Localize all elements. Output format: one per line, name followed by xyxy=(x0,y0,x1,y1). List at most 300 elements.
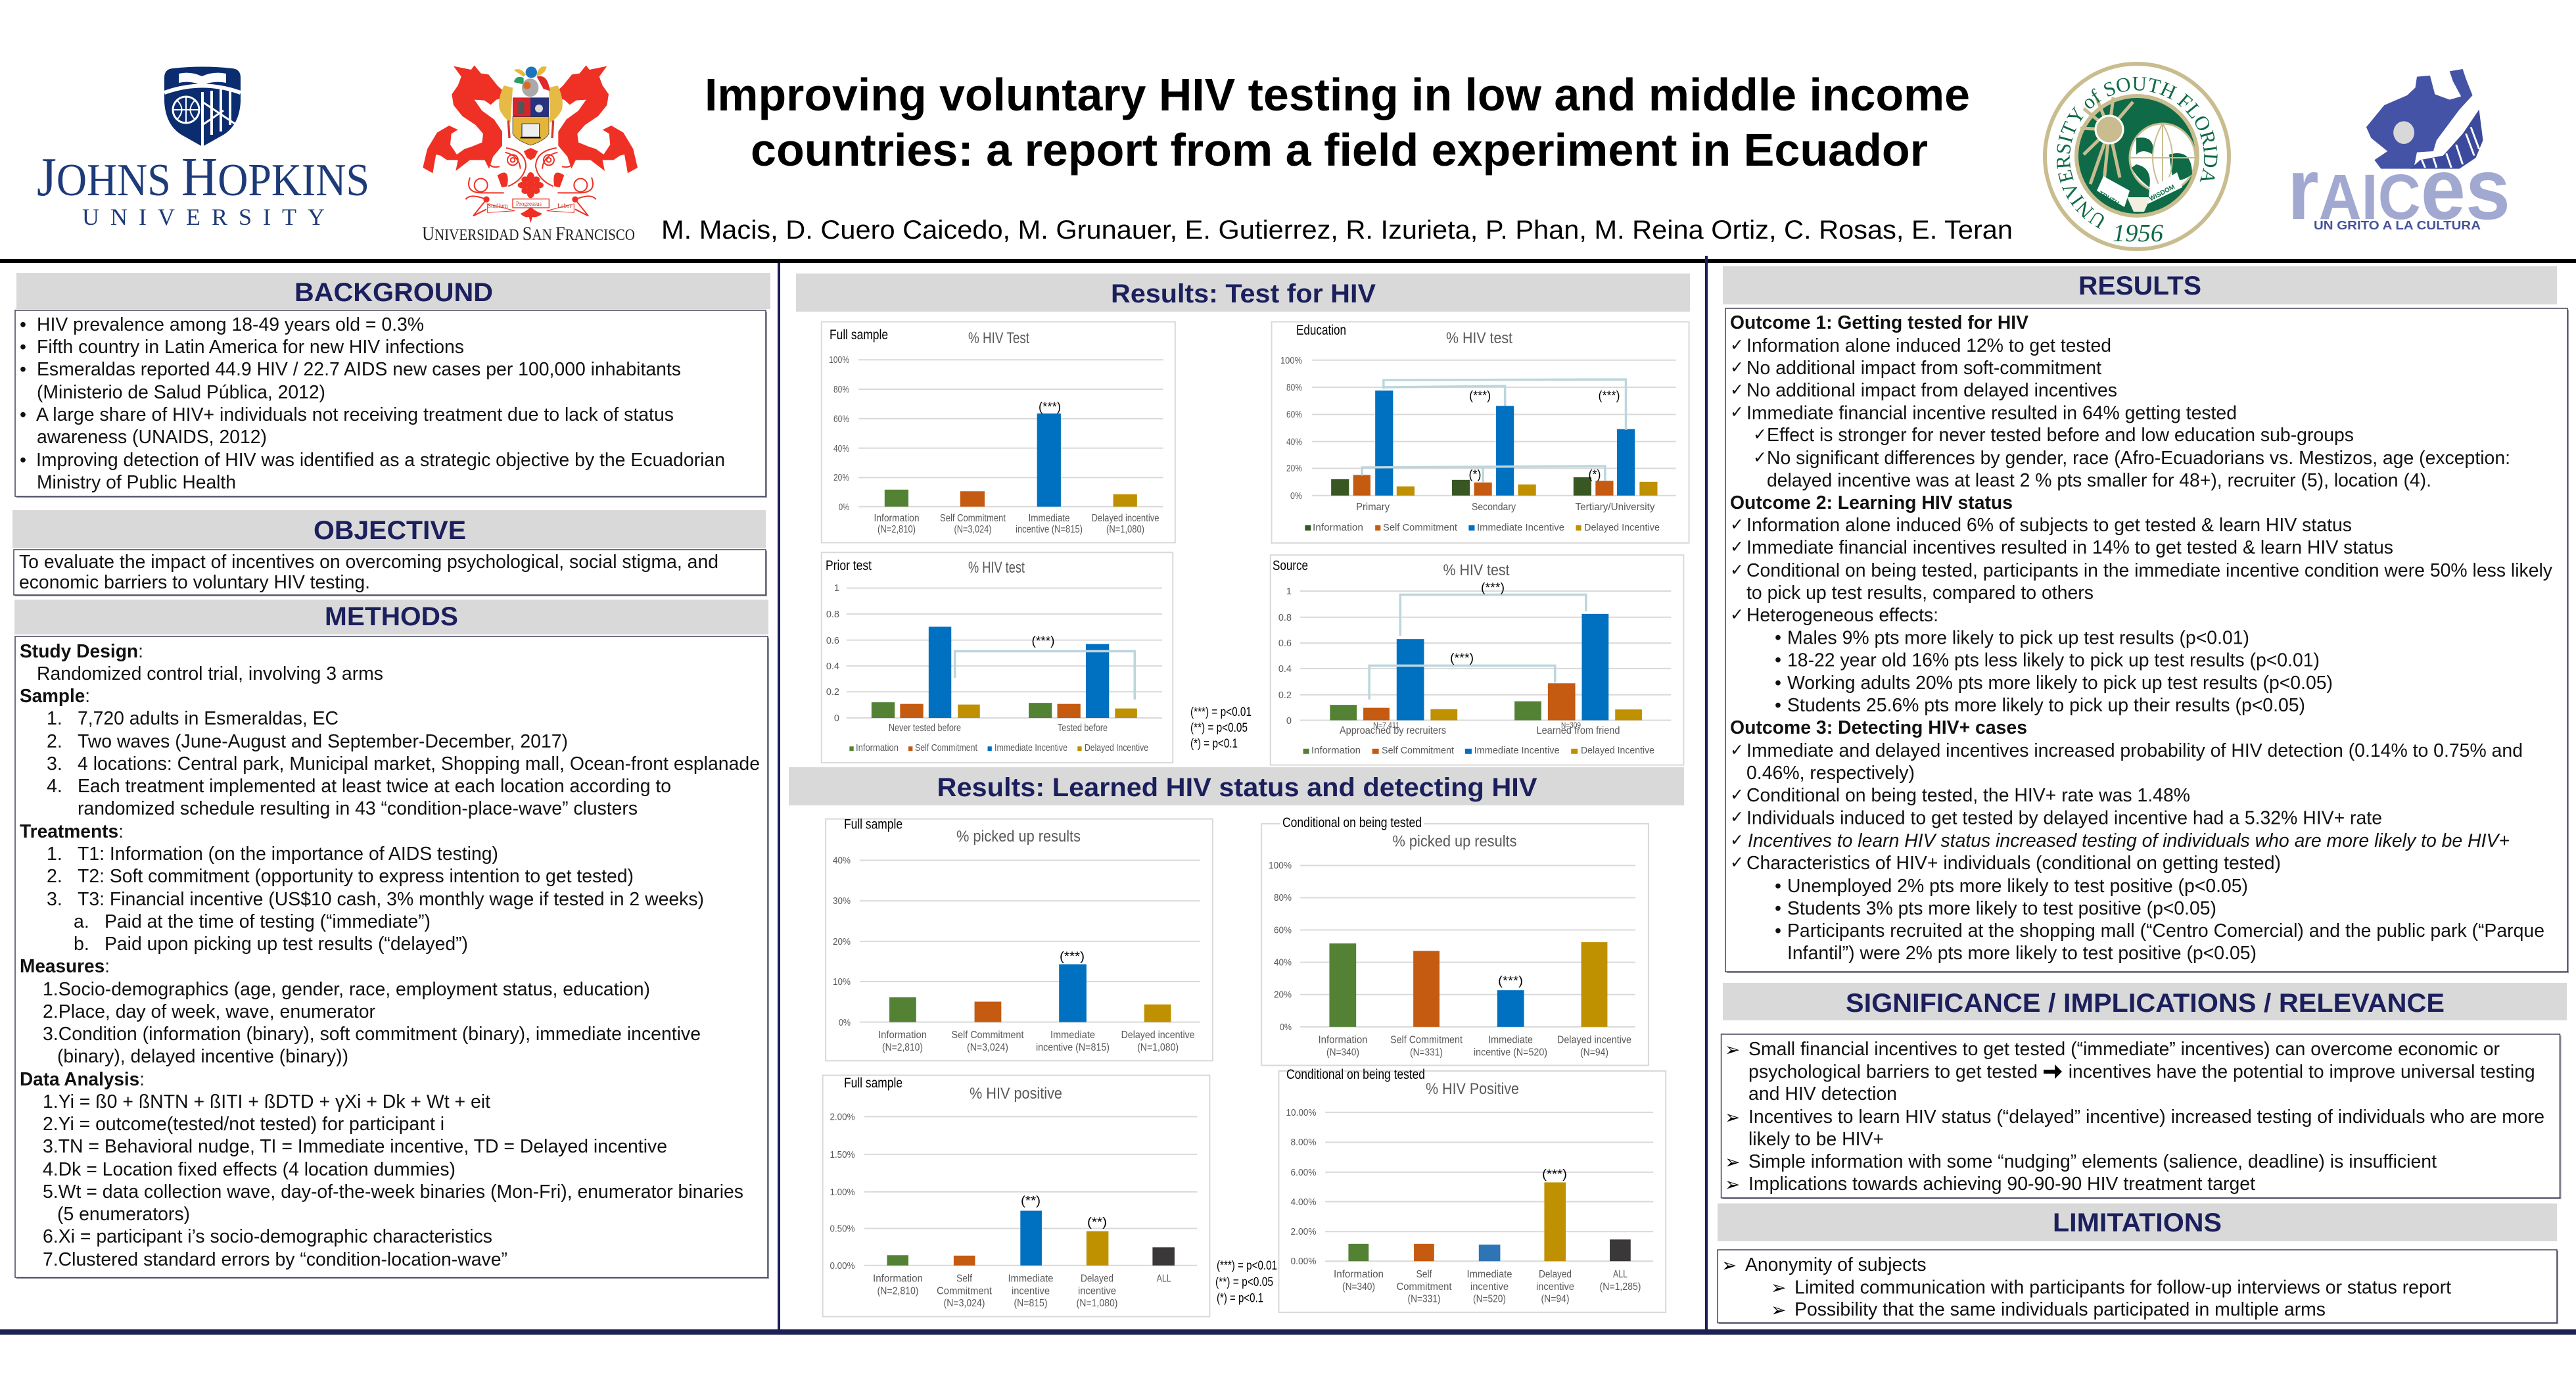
heading: Results: RESULTS xyxy=(2078,272,2201,300)
heading: Results xyxy=(1723,266,2557,304)
chart: conditional percent picked up results: 100% xyxy=(1269,861,1292,871)
chart: conditional percent picked up results: 60% xyxy=(1274,926,1292,936)
heading: Limitations: LIMITATIONS xyxy=(2053,1208,2222,1237)
chart: full sample percent HIV test: 60% xyxy=(833,414,849,425)
panel: results: Individuals induced to get tested by delayed incentive had a 5.32% HIV+ rate xyxy=(1746,807,2382,828)
panel: results: ✓ xyxy=(1730,853,1744,872)
panel: background: Improving detection of HIV was identified as a strategic objective by the Ecuadorian xyxy=(36,450,725,471)
panel: results: ✓ xyxy=(1730,358,1744,377)
chart: prior test percent HIV test: 0.8 xyxy=(826,609,839,620)
chart: full sample percent HIV test: (***) xyxy=(1039,400,1061,414)
chart: full sample percent HIV test: 20% xyxy=(833,473,849,483)
chart: source percent HIV test: Source xyxy=(1273,558,1308,573)
chart: education percent HIV test: Immediate Incentive xyxy=(1477,522,1564,533)
panel: methods: 2. xyxy=(47,866,62,887)
heading: Background: BACKGROUND xyxy=(294,278,493,307)
chart: conditional percent picked up results: Self Commitment xyxy=(1390,1034,1463,1045)
panel: methods: 2. xyxy=(47,731,62,752)
chart: source percent HIV test: 0.4 xyxy=(1278,664,1292,675)
panel: background: Esmeraldas reported 44.9 HIV / 22.7 AIDS new cases per 100,000 inhabitants xyxy=(37,359,681,380)
chart: conditional percent HIV positive: Delayed xyxy=(1539,1269,1572,1280)
panel: results: Conditional on being tested, participants in the immediate incentive condition were 50% less likely xyxy=(1746,560,2553,581)
chart: conditional percent picked up results xyxy=(1261,815,1649,1066)
chart: full sample percent HIV positive: Delayed xyxy=(1081,1273,1113,1284)
panel: significance xyxy=(1721,1034,2561,1199)
heading: Methods: METHODS xyxy=(325,602,458,631)
panel: significance: likely to be HIV+ xyxy=(1748,1129,1884,1150)
panel: limitations: Limited communication with participants for follow-up interviews or status report xyxy=(1794,1277,2451,1298)
chart: source percent HIV test: Information xyxy=(1311,745,1361,756)
chart: conditional percent HIV positive: 10.00% xyxy=(1286,1108,1317,1118)
chart: source percent HIV test: % HIV test xyxy=(1443,561,1510,579)
panel: results: ✓ xyxy=(1730,335,1744,354)
chart: education percent HIV test: % HIV test xyxy=(1446,329,1512,347)
chart: source percent HIV test: Immediate Incentive xyxy=(1474,745,1560,756)
chart: full sample percent picked up results: 10% xyxy=(833,977,851,987)
legend: significance levels, test for HIV: (***) = p<0.01 xyxy=(1190,705,1252,719)
logo: Johns Hopkins University xyxy=(37,67,369,230)
chart: conditional percent picked up results: 40% xyxy=(1274,958,1292,968)
chart: conditional percent picked up results: Information xyxy=(1319,1034,1367,1045)
panel: background: Ministry of Public Health xyxy=(37,472,236,493)
chart: full sample percent picked up results: (N=1,080) xyxy=(1137,1042,1179,1053)
panel: background xyxy=(15,310,767,498)
panel: results: Information alone induced 6% of subjects to get tested & learn HIV status xyxy=(1746,515,2352,536)
chart: education percent HIV test: 40% xyxy=(1286,437,1302,448)
chart: prior test percent HIV test: (***) xyxy=(1032,634,1054,648)
heading: Significance, implications, relevance: SIGNIFICANCE / IMPLICATIONS / RELEVANCE xyxy=(1846,989,2445,1018)
legend: significance levels, detecting HIV xyxy=(1215,1259,1277,1306)
chart: prior test percent HIV test: 0.6 xyxy=(826,636,839,646)
chart: full sample percent HIV test: Immediate xyxy=(1028,513,1070,524)
panel: results: No additional impact from soft-commitment xyxy=(1746,358,2101,379)
chart: full sample percent picked up results: (N=2,810) xyxy=(882,1042,923,1053)
title xyxy=(705,69,1970,176)
chart: full sample percent HIV positive: Information xyxy=(873,1273,923,1284)
panel: methods: 1.Socio-demographics (age, gender, race, employment status, education) xyxy=(43,979,650,1000)
chart: education percent HIV test: 60% xyxy=(1286,410,1302,420)
logo: Universidad San Francisco de Quito xyxy=(422,65,638,245)
icon: JHU shield xyxy=(164,67,241,147)
chart: conditional percent HIV positive: Conditional on being tested xyxy=(1286,1067,1425,1082)
chart: prior test percent HIV test: Information xyxy=(856,742,899,753)
panel: results xyxy=(1725,308,2569,973)
panel: results: Outcome 2: Learning HIV status xyxy=(1730,492,2013,513)
chart: conditional percent picked up results: (N=331) xyxy=(1410,1047,1443,1059)
panel: methods: Data Analysis: xyxy=(20,1069,145,1090)
panel: results: • xyxy=(1775,898,1781,919)
chart: prior test percent HIV test: Prior test xyxy=(826,558,872,573)
panel: background: Fifth country in Latin America for new HIV infections xyxy=(37,337,464,358)
chart: education percent HIV test: 80% xyxy=(1286,383,1302,393)
chart: source percent HIV test: Delayed Incentive xyxy=(1581,745,1654,756)
chart: conditional percent HIV positive: Immediate xyxy=(1467,1269,1512,1280)
heading: Results test for HIV: Results: Test for HIV xyxy=(1111,279,1376,308)
panel: results: to pick up test results, compared to others xyxy=(1746,583,2094,604)
panel: results: ✓ xyxy=(1730,740,1744,759)
chart: prior test percent HIV test: 0 xyxy=(834,713,839,724)
panel: significance: ➢ xyxy=(1725,1106,1740,1128)
chart: full sample percent picked up results: % picked up results xyxy=(956,828,1081,845)
chart: prior test percent HIV test: Self Commitment xyxy=(915,742,978,753)
icon: crest with dragons xyxy=(423,65,638,223)
legend: significance levels, test for HIV xyxy=(1190,705,1252,751)
chart: education percent HIV test: Secondary xyxy=(1472,502,1516,513)
panel: significance: Implications towards achieving 90-90-90 HIV treatment target xyxy=(1748,1174,2255,1195)
crest motto banners: Progressus xyxy=(516,201,542,207)
seal ring text: WISDOM xyxy=(2148,183,2176,203)
logo: University of South Florida seal xyxy=(2043,62,2231,251)
panel: background: • xyxy=(20,359,26,380)
chart: full sample percent HIV test: (N=1,080) xyxy=(1106,524,1144,535)
chart: full sample percent HIV positive: Full sample xyxy=(844,1076,902,1091)
panel: methods: 3. xyxy=(47,753,62,774)
panel: results: Males 9% pts more likely to pick up test results (p<0.01) xyxy=(1787,627,2249,648)
logo tagline: UN GRITO A LA CULTURA xyxy=(2314,219,2481,232)
chart: education percent HIV test: Tertiary/University xyxy=(1575,502,1655,513)
panel: results: ✓ xyxy=(1753,448,1767,467)
chart: source percent HIV test: 0.2 xyxy=(1278,690,1292,701)
panel: results: ✓ xyxy=(1730,605,1744,624)
panel: results: Participants recruited at the shopping mall (“Centro Comercial) and the public park (“Parque xyxy=(1787,920,2544,941)
chart: source percent HIV test xyxy=(1271,555,1683,765)
chart: full sample percent HIV test: 0% xyxy=(839,502,849,513)
seal ring text: UNIVERSITY of SOUTH FLORIDA xyxy=(2056,76,2218,229)
heading: Results test for HIV xyxy=(796,274,1690,312)
heading: Objective xyxy=(12,510,766,548)
legend: significance levels, test for HIV: (**) = p<0.05 xyxy=(1190,721,1248,735)
panel: results: ✓ xyxy=(1753,425,1767,444)
chart: full sample percent HIV test: 80% xyxy=(833,385,849,395)
chart: full sample percent HIV positive: ALL xyxy=(1157,1273,1171,1284)
chart: conditional percent HIV positive: (N=1,285) xyxy=(1600,1281,1641,1293)
chart: full sample percent HIV positive: incentive xyxy=(1078,1286,1116,1297)
panel: methods: Paid at the time of testing (“immediate”) xyxy=(105,911,431,932)
chart: conditional percent picked up results: Conditional on being tested xyxy=(1282,815,1422,830)
chart: source percent HIV test: N=7,411 xyxy=(1373,721,1399,730)
chart: source percent HIV test: Approached by recruiters xyxy=(1340,725,1446,736)
authors: M. Macis, D. Cuero Caicedo, M. Grunauer, E. Gutierrez, R. Izurieta, P. Phan, M. Reina Ortiz, C. Rosas, E. Teran xyxy=(661,216,2013,245)
title: countries: a report from a field experiment in Ecuador xyxy=(751,124,1928,176)
panel: results: ✓ xyxy=(1730,560,1744,579)
panel: methods: 7.Clustered standard errors by “condition-location-wave” xyxy=(43,1249,507,1270)
legend: significance levels, detecting HIV: (***) = p<0.01 xyxy=(1217,1259,1277,1273)
heading: Results learned HIV status and detecting HIV: Results: Learned HIV status and detecting HIV xyxy=(937,773,1537,802)
chart: full sample percent HIV test: % HIV Test xyxy=(968,329,1029,347)
chart: full sample percent HIV test: (N=2,810) xyxy=(878,524,916,535)
chart: conditional percent picked up results: (N=340) xyxy=(1326,1047,1359,1059)
chart: full sample percent HIV positive: 0.00% xyxy=(830,1261,855,1272)
chart: full sample percent picked up results: (***) xyxy=(1060,950,1085,964)
chart: full sample percent HIV test: Delayed incentive xyxy=(1091,513,1159,524)
chart: conditional percent HIV positive: incentive xyxy=(1536,1281,1574,1293)
chart: prior test percent HIV test: Immediate Incentive xyxy=(995,742,1067,753)
panel: background: A large share of HIV+ individuals not receiving treatment due to lack of status xyxy=(36,404,674,425)
chart: conditional percent HIV positive: (N=331) xyxy=(1408,1294,1441,1304)
chart: conditional percent HIV positive: (N=340) xyxy=(1342,1281,1375,1293)
chart: source percent HIV test: Self Commitment xyxy=(1382,745,1455,756)
panel: methods: 2.Place, day of week, wave, enumerator xyxy=(43,1001,376,1022)
panel: results: • xyxy=(1775,650,1781,671)
panel: results: Infantil”) were 2% pts more likely to test positive (p<0.05) xyxy=(1787,943,2257,964)
crest motto banners xyxy=(488,201,572,209)
panel: results: ✓ xyxy=(1730,515,1744,534)
panel: results: Outcome 3: Detecting HIV+ cases xyxy=(1730,717,2027,738)
chart: full sample percent picked up results: 30% xyxy=(833,896,851,907)
legend: significance levels, detecting HIV: (**) = p<0.05 xyxy=(1215,1275,1273,1289)
chart: source percent HIV test: 0 xyxy=(1286,716,1292,726)
chart: full sample percent HIV positive: Self xyxy=(956,1273,973,1284)
chart: conditional percent picked up results: (***) xyxy=(1498,974,1523,988)
panel: objective: economic barriers to voluntary HIV testing. xyxy=(19,572,370,593)
panel: background: • xyxy=(20,314,26,335)
logo wordmark: Universidad San Francisco: UNIVERSIDAD SAN FRANCISCO xyxy=(422,223,635,245)
chart: full sample percent HIV positive: (N=1,080) xyxy=(1077,1298,1117,1309)
chart: full sample percent HIV positive: (N=3,024) xyxy=(944,1298,985,1309)
panel: results: delayed incentive was at least 2 % pts smaller for 48+), recruiter (5), location (4). xyxy=(1767,470,2431,491)
panel: methods: Each treatment implemented at least twice at each location according to xyxy=(78,776,671,797)
panel: methods: a. xyxy=(74,911,89,932)
chart: conditional percent picked up results: 0% xyxy=(1280,1022,1292,1033)
panel: methods: 1. xyxy=(47,708,62,729)
panel: methods: Two waves (June-August and September-December, 2017) xyxy=(78,731,568,752)
panel: significance: Incentives to learn HIV status (“delayed” incentive) increased testing of individuals who are more xyxy=(1748,1106,2544,1128)
chart: full sample percent HIV positive: (N=2,810) xyxy=(877,1286,919,1297)
panel: limitations: ➢ xyxy=(1771,1299,1786,1321)
panel: results: Students 3% pts more likely to test positive (p<0.05) xyxy=(1787,898,2216,919)
logo wordmark: raices: rAICes xyxy=(2287,141,2510,237)
panel: results: Unemployed 2% pts more likely to test positive (p<0.05) xyxy=(1787,876,2248,897)
panel: methods xyxy=(15,636,769,1279)
panel: results: • xyxy=(1775,695,1781,716)
chart: conditional percent HIV positive: Commitment xyxy=(1396,1281,1452,1293)
panel: results: Immediate financial incentive resulted in 64% getting tested xyxy=(1746,402,2237,423)
chart: education percent HIV test: 20% xyxy=(1286,464,1302,474)
panel: results: • xyxy=(1775,876,1781,897)
chart: prior test percent HIV test: 0.2 xyxy=(826,687,839,698)
chart: full sample percent HIV positive: % HIV positive xyxy=(970,1085,1062,1103)
chart: prior test percent HIV test xyxy=(822,552,1173,763)
panel: limitations xyxy=(1718,1250,2558,1324)
panel: significance: ➢ xyxy=(1725,1151,1740,1173)
chart: conditional percent HIV positive: Self xyxy=(1416,1269,1432,1280)
chart: conditional percent HIV positive: 0.00% xyxy=(1291,1256,1317,1267)
chart: prior test percent HIV test: 0.4 xyxy=(826,661,839,672)
panel: methods: 7,720 adults in Esmeraldas, EC xyxy=(78,708,339,729)
panel: limitations: ➢ xyxy=(1721,1254,1737,1276)
crest motto banners: Labor xyxy=(557,202,572,209)
panel: methods: 4 locations: Central park, Municipal market, Shopping mall, Ocean-front esplanade xyxy=(78,753,760,774)
panel: methods: Paid upon picking up test results (“delayed”) xyxy=(105,934,468,955)
chart: full sample percent picked up results: Information xyxy=(878,1030,927,1041)
chart: full sample percent picked up results: Immediate xyxy=(1050,1030,1095,1041)
chart: source percent HIV test: (***) xyxy=(1450,652,1474,665)
chart: full sample percent HIV test: 100% xyxy=(829,355,849,366)
panel: results: Effect is stronger for never tested before and low education sub-groups xyxy=(1767,425,2354,446)
panel: methods: T2: Soft commitment (opportunity to express intention to get tested) xyxy=(78,866,634,887)
chart: education percent HIV test: (*) xyxy=(1468,468,1482,482)
chart: education percent HIV test: Delayed Incentive xyxy=(1584,522,1660,533)
panel: methods: Measures: xyxy=(20,956,110,977)
legend: significance levels, detecting HIV: (*) = p<0.1 xyxy=(1217,1291,1263,1306)
panel: methods: Treatments: xyxy=(20,821,124,842)
heading: Methods xyxy=(14,600,768,634)
chart: prior test percent HIV test: Never tested before xyxy=(889,723,961,734)
chart: full sample percent HIV positive: Immediate xyxy=(1008,1273,1053,1284)
heading: Background xyxy=(16,273,770,309)
panel: objective: To evaluate the impact of incentives on overcoming psychological, social stigma, and xyxy=(19,552,718,573)
heading: Limitations xyxy=(1718,1203,2557,1241)
chart: full sample percent HIV positive: 1.50% xyxy=(830,1150,855,1160)
panel: methods: 1.Yi = ß0 + ßNTN + ßITI + ßDTD + γXi + Dk + Wt + eit xyxy=(43,1091,490,1112)
panel: background: • xyxy=(20,450,26,471)
chart: full sample percent picked up results: 40% xyxy=(833,856,851,867)
panel: methods: 3.Condition (information (binary), soft commitment (binary), immediate incentive xyxy=(43,1024,701,1045)
chart: conditional percent HIV positive: (N=94) xyxy=(1541,1294,1570,1304)
chart: full sample percent HIV test xyxy=(822,322,1175,542)
panel: results: 0.46%, respectively) xyxy=(1746,763,1915,784)
panel: significance: psychological barriers to get tested xyxy=(1748,1061,2038,1082)
panel: results: • xyxy=(1775,673,1781,694)
heading: Objective: OBJECTIVE xyxy=(314,516,466,545)
chart: full sample percent HIV test: incentive (N=815) xyxy=(1016,524,1083,535)
chart: education percent HIV test: (***) xyxy=(1469,389,1491,403)
chart: full sample percent HIV test: 40% xyxy=(833,444,849,454)
panel: results: Characteristics of HIV+ individuals (conditional on getting tested) xyxy=(1746,853,2281,874)
chart: prior test percent HIV test: 1 xyxy=(834,583,839,594)
chart: education percent HIV test: Primary xyxy=(1356,502,1390,513)
chart: full sample percent picked up results xyxy=(826,817,1213,1060)
panel: methods: 4. xyxy=(47,776,62,797)
chart: full sample percent HIV test: Information xyxy=(874,513,919,524)
chart: conditional percent HIV positive: 6.00% xyxy=(1291,1168,1317,1178)
chart: conditional percent picked up results: Delayed incentive xyxy=(1557,1034,1631,1045)
icon: Raices figure with drum xyxy=(2366,69,2483,169)
chart: full sample percent picked up results: incentive (N=815) xyxy=(1036,1042,1110,1053)
panel: significance: Simple information with some “nudging” elements (salience, deadline) is insufficient xyxy=(1748,1151,2437,1172)
chart: full sample percent picked up results: 0% xyxy=(839,1018,851,1028)
panel: significance: incentives have the potential to improve universal testing xyxy=(2069,1061,2535,1082)
panel: methods: Sample: xyxy=(20,686,90,707)
panel: results: Immediate financial incentives resulted in 14% to get tested & learn HIV status xyxy=(1746,537,2393,558)
seal ring text: TRUTH xyxy=(2097,190,2120,208)
chart: full sample percent picked up results: Delayed incentive xyxy=(1121,1030,1195,1041)
chart: full sample percent picked up results: Full sample xyxy=(844,817,902,832)
panel: significance: Small financial incentives to get tested (“immediate” incentives) can overcome economic or xyxy=(1748,1039,2500,1060)
chart: conditional percent picked up results: 20% xyxy=(1274,990,1292,1001)
panel: methods: 1. xyxy=(47,844,62,865)
panel: significance: ➢ xyxy=(1725,1174,1740,1195)
chart: full sample percent picked up results: 20% xyxy=(833,937,851,947)
panel: background: (Ministerio de Salud Pública, 2012) xyxy=(37,382,325,403)
panel: objective xyxy=(14,550,767,596)
panel: results: 18-22 year old 16% pts less likely to pick up test results (p<0.01) xyxy=(1787,650,2320,671)
chart: full sample percent HIV positive: incentive xyxy=(1012,1286,1050,1297)
chart: prior test percent HIV test: % HIV test xyxy=(968,559,1025,577)
chart: conditional percent HIV positive: (***) xyxy=(1542,1168,1567,1181)
chart: source percent HIV test: 0.6 xyxy=(1278,638,1292,649)
chart: education percent HIV test: (*) xyxy=(1588,468,1601,482)
panel: methods: T3: Financial incentive (US$10 cash, 3% monthly wage if tested in 2 weeks) xyxy=(78,889,704,910)
panel: methods: Study Design: xyxy=(20,641,143,662)
chart: source percent HIV test: Learned from friend xyxy=(1537,725,1620,736)
panel: results: Immediate and delayed incentives increased probability of HIV detection (0.14% to 0.75% and xyxy=(1746,740,2523,761)
panel: results: ✓ xyxy=(1730,537,1744,556)
panel: methods: 3.TN = Behavioral nudge, TI = Immediate incentive, TD = Delayed incentive xyxy=(43,1136,667,1157)
chart: conditional percent HIV positive: ALL xyxy=(1613,1269,1628,1280)
chart: source percent HIV test: (***) xyxy=(1481,581,1505,595)
panel: limitations: Possibility that the same individuals participated in multiple arms xyxy=(1794,1299,2326,1320)
panel: methods: 3. xyxy=(47,889,62,910)
panel: limitations: ➢ xyxy=(1771,1277,1786,1298)
chart: conditional percent HIV positive: 4.00% xyxy=(1291,1197,1317,1208)
chart: conditional percent picked up results: (N=94) xyxy=(1580,1047,1608,1059)
logo wordmark: Johns Hopkins: JOHNS HOPKINS xyxy=(37,147,369,208)
chart: full sample percent HIV test: Self Commitment xyxy=(940,513,1006,524)
panel: methods: 6.Xi = participant i’s socio-demographic characteristics xyxy=(43,1226,492,1247)
chart: conditional percent HIV positive: Information xyxy=(1334,1269,1384,1280)
panel: results: Students 25.6% pts more likely to pick up their results (p<0.05) xyxy=(1787,695,2305,716)
panel: results: No additional impact from delayed incentives xyxy=(1746,380,2117,401)
chart: conditional percent HIV positive: % HIV Positive xyxy=(1426,1080,1519,1098)
chart: conditional percent HIV positive: (N=520) xyxy=(1473,1294,1506,1304)
panel: results: Information alone induced 12% to get tested xyxy=(1746,335,2111,356)
chart: education percent HIV test: (***) xyxy=(1599,389,1620,403)
panel: significance: ➢ xyxy=(1725,1039,1740,1060)
panel: background: awareness (UNAIDS, 2012) xyxy=(37,427,267,448)
title: Improving voluntary HIV testing in low and middle income xyxy=(705,69,1970,120)
logo: Raices xyxy=(2287,69,2510,237)
chart: conditional percent picked up results: % picked up results xyxy=(1392,833,1517,851)
legend: significance levels, test for HIV: (*) = p<0.1 xyxy=(1190,737,1238,751)
panel: background: • xyxy=(20,404,26,425)
panel: methods: 2.Yi = outcome(tested/not tested) for participant i xyxy=(43,1114,444,1135)
chart: conditional percent picked up results: incentive (N=520) xyxy=(1474,1047,1547,1059)
panel: results: Outcome 1: Getting tested for HIV xyxy=(1730,312,2028,333)
chart: conditional percent HIV positive xyxy=(1278,1067,1666,1312)
seal ring text: 1956 xyxy=(2113,220,2163,247)
chart: source percent HIV test: 1 xyxy=(1286,586,1292,597)
panel: limitations: Anonymity of subjects xyxy=(1745,1254,1926,1275)
panel: methods: 5.Wt = data collection wave, day-of-the-week binaries (Mon-Fri), enumerator binaries xyxy=(43,1181,743,1202)
panel: results: ✓ xyxy=(1730,402,1744,421)
chart: education percent HIV test xyxy=(1272,322,1689,543)
panel: methods: b. xyxy=(74,934,89,955)
chart: source percent HIV test: N=309 xyxy=(1561,721,1581,730)
panel: background: HIV prevalence among 18-49 years old = 0.3% xyxy=(37,314,424,335)
chart: source percent HIV test: 0.8 xyxy=(1278,613,1292,623)
chart: full sample percent HIV positive: Commitment xyxy=(937,1286,993,1297)
panel: significance: and HIV detection xyxy=(1748,1083,1897,1105)
chart: education percent HIV test: 100% xyxy=(1280,356,1302,366)
chart: full sample percent HIV positive: (N=815) xyxy=(1014,1298,1048,1309)
panel: results: • xyxy=(1775,627,1781,648)
panel: results: No significant differences by gender, race (Afro-Ecuadorians vs. Mestizos, age (exception: xyxy=(1767,448,2510,469)
chart: conditional percent HIV positive: incentive xyxy=(1470,1281,1509,1293)
chart: education percent HIV test: 0% xyxy=(1290,491,1302,502)
crest motto banners: Studium xyxy=(488,202,508,209)
chart: education percent HIV test: Self Commitment xyxy=(1383,522,1458,533)
panel: results: Heterogeneous effects: xyxy=(1746,605,1938,626)
chart: full sample percent picked up results: (N=3,024) xyxy=(967,1042,1008,1053)
panel: results: Working adults 20% pts more likely to pick up test results (p<0.05) xyxy=(1787,673,2333,694)
chart: full sample percent picked up results: Self Commitment xyxy=(952,1030,1024,1041)
panel: results: Incentives to learn HIV status increased testing of individuals who are more likely to be HIV+ xyxy=(1748,830,2510,851)
heading: Results learned HIV status and detecting HIV xyxy=(789,767,1684,805)
panel: methods: (5 enumerators) xyxy=(57,1204,190,1225)
chart: full sample percent HIV test: Full sample xyxy=(830,327,888,343)
panel: results: • xyxy=(1775,920,1781,941)
